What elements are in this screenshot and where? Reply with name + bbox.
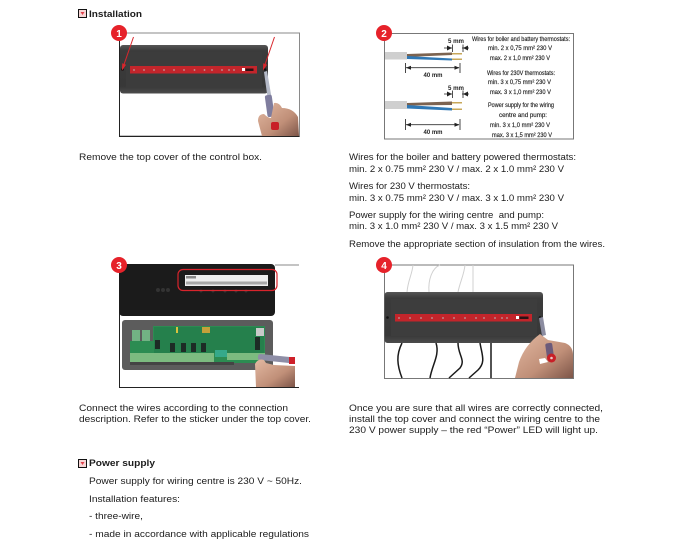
text: step 4 caption: 230 V power supply – the red “Power” LED will light up. — [349, 425, 598, 436]
dimension 5 mm lower: 5 mm — [448, 85, 464, 92]
text: step 2 description: min. 3 x 0.75 mm² 230 V / max. 3 x 1.0 mm² 230 V — [349, 193, 565, 204]
text: step 4 caption: install the top cover and connect the wiring centre to the — [349, 414, 600, 425]
sticker highlight — [178, 270, 277, 290]
wire spec labels — [472, 36, 570, 139]
panel: step 2 wire specs — [376, 25, 574, 139]
text: step 1 caption: Remove the top cover of the control box. — [79, 152, 262, 163]
text: power supply details: Power supply for wiring centre is 230 V ~ 50Hz. — [89, 476, 302, 487]
text: power supply details: - made in accordance with applicable regulations — [89, 529, 309, 540]
badge 3: 3 — [116, 261, 122, 272]
wire spec labels: Wires for boiler and battery thermostats: — [472, 36, 570, 43]
black wires — [398, 343, 491, 378]
panel: step 4 install cover — [376, 257, 574, 378]
frame — [275, 264, 299, 266]
badge 2 — [376, 25, 392, 41]
frame — [120, 33, 300, 136]
wiring centre — [384, 292, 543, 343]
dimension 40 mm lower — [406, 119, 460, 136]
dimension 40 mm lower: 40 mm — [424, 129, 443, 136]
wire spec labels: min. 2 x 0,75 mm² 230 V — [488, 45, 553, 52]
badge 3 — [111, 257, 127, 273]
wire spec labels: max. 2 x 1,0 mm² 230 V — [490, 55, 551, 62]
wire spec labels: Power supply for the wiring — [488, 102, 554, 109]
badge 1 — [111, 25, 127, 41]
text: step 2 description: Remove the appropriate section of insulation from the wires. — [349, 239, 605, 250]
hand with screwdriver — [255, 354, 295, 387]
dimension 5 mm lower — [444, 85, 469, 98]
badge 1: 1 — [116, 29, 122, 40]
hand with screwdriver — [258, 71, 299, 136]
wire spec labels: centre and pump: — [499, 112, 547, 119]
text: step 3 caption: description. Refer to the sticker under the top cover. — [79, 414, 311, 425]
text: step 2 description — [349, 152, 605, 250]
circuit board — [122, 320, 273, 370]
text: step 4 caption: Once you are sure that all wires are correctly connected, — [349, 403, 603, 414]
text: step 2 description: min. 3 x 1.0 mm² 230 V / max. 3 x 1.5 mm² 230 V — [349, 221, 559, 232]
wire spec labels: min. 3 x 1,0 mm² 230 V — [490, 122, 551, 129]
control box — [120, 45, 268, 94]
wire spec labels: max. 3 x 1,0 mm² 230 V — [490, 89, 552, 96]
dimension 40 mm upper — [406, 63, 460, 79]
arrows — [122, 37, 274, 69]
wire spec labels: Wires for 230V thermostats: — [487, 70, 555, 77]
top cover with sticker — [119, 264, 275, 316]
dimension 40 mm upper: 40 mm — [424, 72, 443, 79]
text: step 3 caption: Connect the wires according to the connection — [79, 403, 288, 414]
wire spec labels: min. 3 x 0,75 mm² 230 V — [488, 79, 552, 86]
badge 2: 2 — [381, 29, 387, 40]
text: step 2 description: Wires for the boiler and battery powered thermostats: — [349, 152, 576, 163]
text: step 3 caption — [79, 403, 311, 425]
frame — [384, 34, 574, 139]
panel: step 1 remove cover — [111, 25, 300, 136]
text: step 2 description: Wires for 230 V thermostats: — [349, 181, 470, 192]
dimension 5 mm upper — [444, 38, 469, 52]
text: power supply details: Installation features: — [89, 494, 180, 505]
frame — [384, 265, 574, 378]
badge 4: 4 — [381, 261, 387, 272]
badge 4 — [376, 257, 392, 273]
panel: step 3 connect wires — [111, 257, 299, 388]
white wires — [407, 265, 473, 292]
text: step 4 caption — [349, 403, 603, 436]
cable 1 — [385, 52, 462, 60]
text: step 2 description: min. 2 x 0.75 mm² 230 V / max. 2 x 1.0 mm² 230 V — [349, 164, 565, 175]
hand with screwdriver — [515, 317, 573, 378]
heading: Power supply: Power supply — [89, 458, 156, 469]
cable 2 — [385, 101, 462, 110]
heading: Installation: Installation — [89, 9, 142, 20]
text: power supply details — [89, 476, 309, 540]
text: step 2 description: Power supply for the wiring centre and pump: — [349, 210, 544, 221]
wire spec labels: max. 3 x 1,5 mm² 230 V — [492, 132, 553, 139]
dimension 5 mm upper: 5 mm — [448, 38, 464, 45]
text: power supply details: - three-wire, — [89, 511, 143, 522]
